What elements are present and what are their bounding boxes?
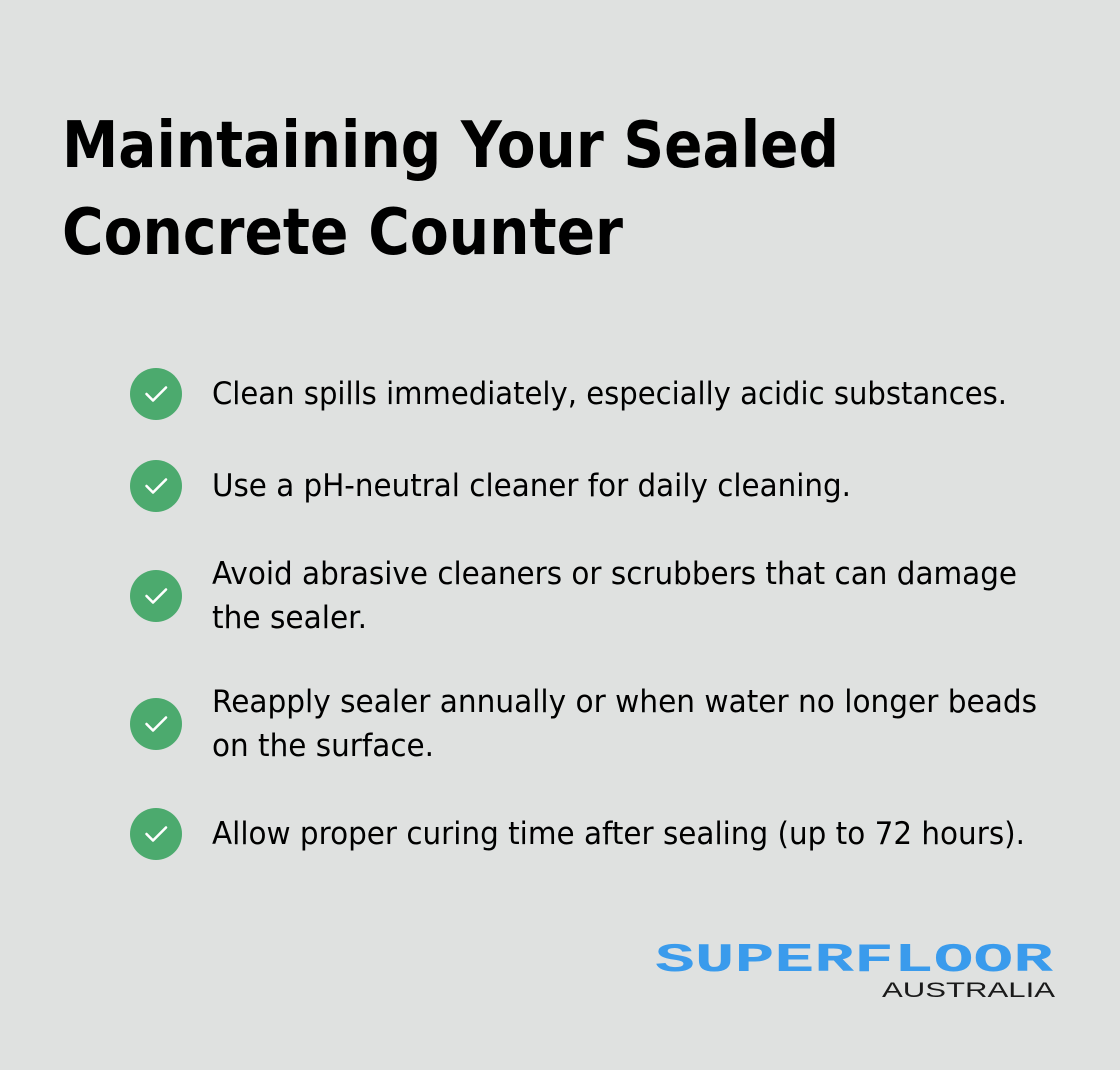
item: curing time: Allow proper curing time after sealing (up to 72 hours).	[212, 816, 1025, 852]
item: reapply sealer: on the surface.	[212, 728, 434, 764]
title: Concrete Counter	[62, 196, 623, 270]
item: pH-neutral cleaner: Use a pH-neutral cleaner for daily cleaning.	[212, 468, 851, 504]
item: clean spills	[130, 368, 1007, 420]
item: reapply sealer	[130, 684, 1037, 764]
checklist	[130, 368, 1037, 860]
logo: Superfloor Australia	[655, 938, 1055, 1002]
item: curing time	[130, 808, 1025, 860]
item: avoid abrasive cleaners	[130, 556, 1017, 636]
item: pH-neutral cleaner	[130, 460, 851, 512]
title: Maintaining Your Sealed	[62, 109, 839, 183]
logo: Superfloor Australia: AUSTRALIA	[882, 979, 1055, 1002]
title	[62, 109, 839, 270]
item: avoid abrasive cleaners: the sealer.	[212, 600, 367, 636]
item: reapply sealer: Reapply sealer annually or when water no longer beads	[212, 684, 1037, 720]
logo: Superfloor Australia: SUPERFLOOR	[655, 938, 1054, 984]
item: avoid abrasive cleaners: Avoid abrasive cleaners or scrubbers that can damage	[212, 556, 1017, 592]
item: clean spills: Clean spills immediately, especially acidic substances.	[212, 376, 1007, 412]
